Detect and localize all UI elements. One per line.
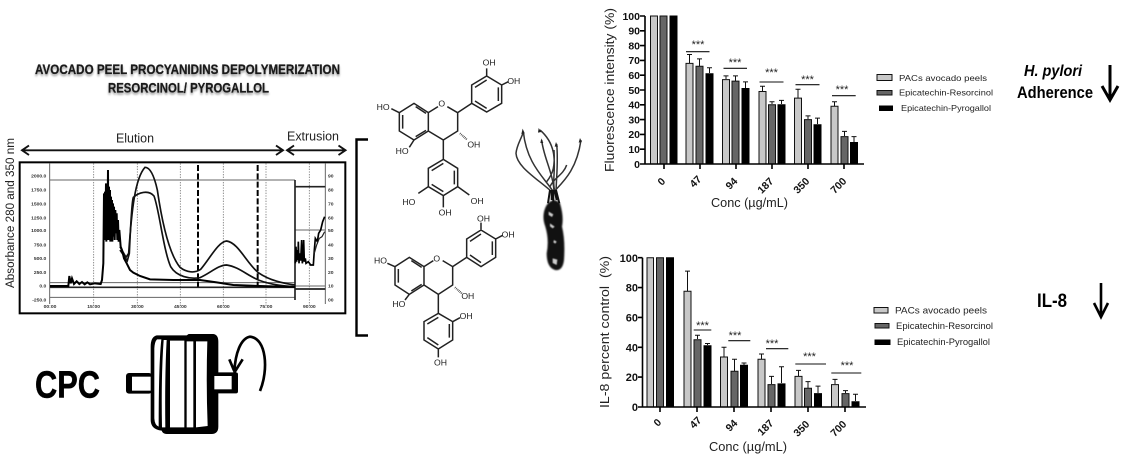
x tick labels: 350 — [791, 175, 812, 196]
arrow: extrusion range — [287, 146, 346, 155]
series: PACs avocado peels — [647, 258, 838, 407]
axis tick labels: 1500.0 — [31, 201, 47, 207]
significance markers: *** — [765, 67, 779, 79]
molecule: epicatechin-resorcinol: HO — [392, 299, 406, 309]
axis tick labels: 40 — [328, 242, 334, 248]
y tick labels: 90 — [628, 26, 640, 38]
axis tick labels: 60 — [328, 215, 334, 221]
legend: fluorescence chart: Epicatechin-Resorcinol — [899, 88, 993, 98]
significance markers: *** — [836, 84, 849, 96]
significance markers: *** — [692, 39, 705, 51]
molecule: epicatechin-pyrogallol — [377, 58, 520, 218]
icon: CPC centrifuge — [126, 334, 265, 434]
series: PACs avocado peels — [650, 16, 838, 164]
y tick labels: 40 — [626, 342, 638, 354]
x tick labels: 47 — [688, 173, 704, 190]
axis tick labels: 15:00 — [87, 304, 100, 310]
significance markers: *** — [841, 360, 854, 372]
axis tick labels: 90 — [328, 174, 334, 180]
axis tick labels: 30 — [328, 256, 334, 262]
label: Extrusion: Extrusion — [287, 128, 339, 144]
curve: 280 nm — [120, 167, 295, 285]
x tick labels — [652, 414, 849, 439]
axis tick labels: 50 — [328, 228, 334, 234]
series: Epicatechin-Resorcinol — [660, 16, 848, 164]
molecule: epicatechin-pyrogallol: OH — [467, 140, 480, 150]
y tick labels: 80 — [628, 40, 640, 52]
x tick labels: 0 — [652, 416, 664, 429]
legend: IL-8 chart: Epicatechin-Pyrogallol — [897, 337, 990, 347]
axis tick labels: 1250.0 — [31, 215, 47, 221]
y tick labels: 30 — [628, 114, 640, 126]
significance markers: *** — [803, 351, 817, 363]
molecule: epicatechin-resorcinol: OH — [460, 311, 473, 321]
legend: IL-8 chart: Epicatechin-Resorcinol — [896, 321, 993, 331]
molecule: epicatechin-resorcinol: O — [433, 253, 440, 263]
axis tick labels: 70 — [328, 201, 334, 207]
arrow: IL-8 decrease — [1094, 283, 1108, 317]
x tick labels: 94 — [724, 417, 740, 434]
chart: IL-8 percent control — [597, 253, 866, 454]
y tick labels: 40 — [628, 100, 640, 112]
series: Epicatechin-Pyrogallol — [670, 16, 858, 164]
axis tick labels: 250.0 — [34, 270, 47, 276]
title — [35, 61, 340, 96]
axis tick labels: 60:00 — [217, 304, 230, 310]
y tick labels: 50 — [628, 85, 640, 97]
axis tick labels: 20 — [328, 270, 334, 276]
molecule: epicatechin-resorcinol: OH — [434, 357, 447, 367]
y tick labels — [622, 11, 640, 171]
axis tick labels: 1750.0 — [31, 188, 47, 194]
x tick labels: 187 — [755, 417, 776, 438]
molecule: epicatechin-resorcinol: HO — [374, 256, 387, 266]
axis tick labels: 10 — [328, 284, 334, 290]
axis tick labels: 00 — [328, 298, 334, 304]
x axis title: Conc (µg/mL) — [711, 195, 788, 210]
y axis title: IL-8 percent control (%) — [597, 256, 612, 408]
series: Epicatechin-Resorcinol — [656, 258, 849, 407]
axis tick labels — [31, 174, 334, 310]
molecule: epicatechin-pyrogallol: OH — [471, 196, 484, 206]
significance markers: *** — [766, 338, 779, 350]
axis tick labels: 80 — [328, 188, 334, 194]
arrow: adherence decrease — [1102, 65, 1118, 100]
x tick labels: 94 — [724, 175, 740, 192]
significance markers: *** — [696, 320, 710, 332]
y tick labels: 10 — [628, 144, 640, 156]
legend: fluorescence chart: Epicatechin-Pyrogallol — [901, 103, 991, 113]
arrow: elution range — [22, 146, 283, 155]
significance markers — [686, 39, 856, 96]
y axis label: absorbance: Absorbance 280 and 350 nm — [5, 138, 17, 288]
curve: extrusion trace — [295, 217, 325, 265]
y tick labels: 0 — [634, 159, 640, 171]
y tick labels: 20 — [626, 372, 638, 384]
axis tick labels: -250.0 — [32, 298, 47, 304]
legend: fluorescence chart — [877, 73, 993, 113]
axis tick labels: 45:00 — [174, 304, 187, 310]
label: CPC: CPC — [35, 364, 100, 406]
legend: fluorescence chart: PACs avocado peels — [899, 73, 987, 83]
molecule: epicatechin-pyrogallol: HO — [377, 102, 390, 112]
chart: fluorescence intensity — [602, 8, 864, 210]
molecule: epicatechin-pyrogallol: O — [438, 99, 445, 109]
legend: IL-8 chart — [874, 306, 993, 347]
x tick labels: 0 — [656, 175, 668, 188]
y tick labels: 100 — [620, 253, 638, 265]
axes — [640, 16, 864, 169]
significance markers — [694, 320, 861, 373]
label: H. pylori adherence: Adherence — [1017, 83, 1093, 102]
significance markers: *** — [729, 330, 742, 342]
chart: chromatogram — [20, 162, 345, 313]
legend: IL-8 chart: PACs avocado peels — [895, 306, 988, 316]
significance markers: *** — [729, 57, 742, 69]
x tick labels: 187 — [755, 175, 776, 196]
label: IL-8: IL-8 — [1037, 291, 1067, 312]
label: H. pylori adherence: H. pylori — [1024, 63, 1082, 80]
molecule: epicatechin-resorcinol — [374, 213, 515, 367]
axis tick labels: 75:00 — [260, 304, 273, 310]
title: RESORCINOL/ PYROGALLOL — [108, 80, 269, 96]
x tick labels: 700 — [828, 175, 849, 196]
axis tick labels: 500.0 — [34, 256, 47, 262]
axis tick labels: 1000.0 — [31, 228, 47, 234]
x tick labels: 47 — [688, 414, 704, 431]
molecule: epicatechin-pyrogallol: OH — [483, 58, 496, 68]
y tick labels: 70 — [628, 55, 640, 67]
bracket — [356, 140, 368, 336]
y tick labels — [620, 253, 638, 414]
y axis title: Fluorescence intensity (%) — [602, 8, 617, 172]
molecule: epicatechin-resorcinol: OH — [502, 229, 515, 239]
molecule: epicatechin-pyrogallol: OH — [439, 208, 452, 218]
x tick labels — [656, 173, 849, 196]
axes — [638, 258, 866, 412]
illustration: root — [516, 128, 582, 270]
curve: 350 nm — [120, 192, 295, 287]
label: H. pylori adherence — [1017, 63, 1093, 102]
molecule: epicatechin-pyrogallol: HO — [396, 146, 409, 156]
series: Epicatechin-Pyrogallol — [666, 258, 859, 407]
error bars — [687, 54, 856, 142]
axis tick labels: 30:00 — [131, 304, 144, 310]
curve: noisy trace — [50, 170, 295, 287]
y tick labels: 20 — [628, 129, 640, 141]
x axis title: Conc (µg/mL) — [709, 439, 787, 454]
molecule: epicatechin-resorcinol: OH — [477, 213, 490, 223]
significance markers: *** — [801, 74, 815, 86]
axis tick labels: 2000.0 — [31, 174, 47, 180]
y tick labels: 60 — [626, 312, 638, 324]
error bars — [685, 271, 858, 401]
y tick labels: 60 — [628, 70, 640, 82]
axis tick labels: 0.0 — [39, 284, 47, 290]
title: AVOCADO PEEL PROCYANIDINS DEPOLYMERIZATION — [35, 61, 340, 77]
label: Elution: Elution — [116, 130, 154, 146]
molecule: epicatechin-resorcinol: OH — [461, 291, 474, 301]
molecule: epicatechin-pyrogallol: HO — [402, 197, 416, 207]
y tick labels: 80 — [626, 282, 638, 294]
molecule: epicatechin-pyrogallol: OH — [507, 76, 520, 86]
x tick labels: 350 — [791, 418, 812, 439]
axis tick labels: 00:00 — [44, 304, 57, 310]
y tick labels: 100 — [622, 11, 640, 23]
y tick labels: 0 — [632, 402, 638, 414]
x tick labels: 700 — [828, 418, 849, 439]
axis tick labels: 90:00 — [303, 304, 316, 310]
axis tick labels: 750.0 — [34, 242, 47, 248]
